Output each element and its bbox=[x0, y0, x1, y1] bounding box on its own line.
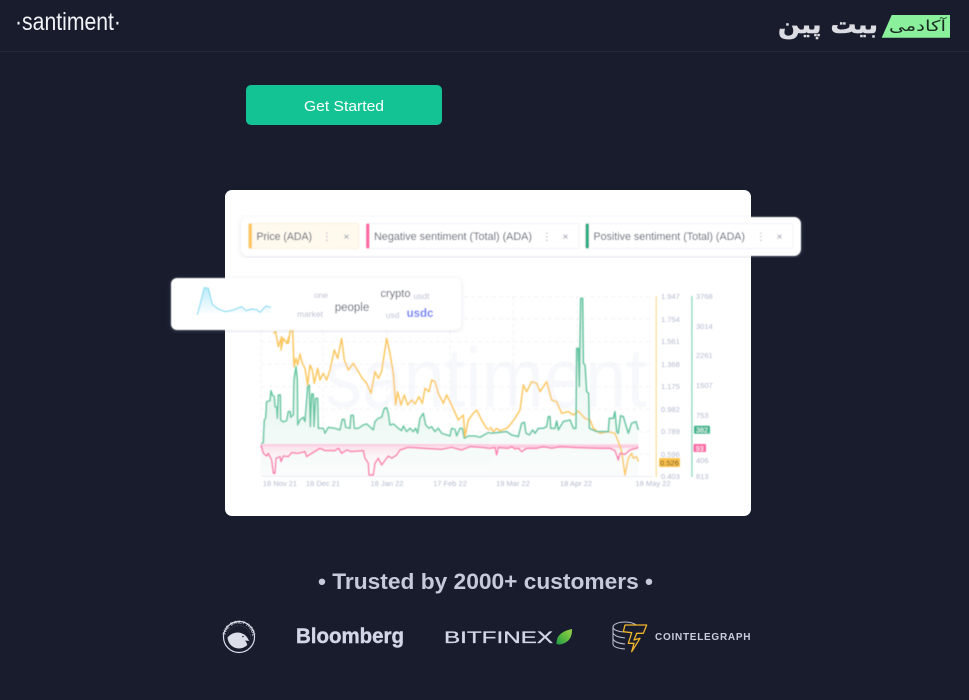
trending words: usdc bbox=[407, 308, 434, 320]
chart: price and sentiment: 3014 bbox=[696, 322, 713, 331]
chart: price and sentiment bbox=[261, 292, 713, 488]
logo: the daily hodl eagle: THE DAILY HODL bbox=[222, 620, 256, 636]
heading: trusted by customers: • Trusted by 2000+ customers • bbox=[318, 569, 653, 594]
logo: academy badge: بیت پین bbox=[778, 10, 878, 40]
logo: academy badge bbox=[778, 10, 950, 40]
chip: positive sentiment bbox=[586, 224, 793, 248]
chart: price and sentiment: 1.947 bbox=[661, 292, 680, 301]
logo: bloomberg: Bloomberg bbox=[296, 625, 404, 648]
chart: price and sentiment: 2261 bbox=[696, 351, 713, 360]
sparkline bbox=[197, 288, 271, 315]
chip: negative sentiment: ⋮ bbox=[542, 231, 552, 243]
chip: price: Price (ADA) bbox=[256, 231, 312, 243]
chart: price and sentiment: 19 Mar 22 bbox=[496, 479, 530, 488]
chart: price and sentiment: 406 bbox=[696, 456, 709, 465]
logo: academy badge: آکادمی bbox=[889, 17, 947, 35]
chart: price and sentiment: 753 bbox=[696, 411, 709, 420]
chip: positive sentiment: ⋮ bbox=[756, 231, 766, 243]
panel: chart screenshot card bbox=[225, 190, 751, 516]
chart: price and sentiment: 0.403 bbox=[661, 472, 680, 481]
chart: price and sentiment: 18 Jan 22 bbox=[371, 479, 403, 488]
logo: santiment: ·santiment· bbox=[15, 8, 121, 36]
icon: coins and lightning bolt bbox=[613, 622, 647, 652]
chart: price and sentiment: 1.561 bbox=[661, 337, 680, 346]
chart: price and sentiment: 1.368 bbox=[661, 360, 680, 369]
chart: price and sentiment: 18 Dec 21 bbox=[306, 479, 340, 488]
chip: negative sentiment bbox=[366, 224, 579, 248]
chart: price and sentiment: 18 May 22 bbox=[635, 479, 671, 488]
chip: positive sentiment: × bbox=[776, 231, 783, 243]
chip: price: × bbox=[343, 231, 350, 243]
chart: price and sentiment: 0.526 bbox=[660, 458, 679, 468]
button: get started: Get Started bbox=[304, 98, 384, 115]
chart: price and sentiment: 0.789 bbox=[661, 427, 680, 436]
trending words: usdt bbox=[413, 291, 430, 301]
chart: price and sentiment: 813 bbox=[696, 472, 709, 481]
trending words bbox=[297, 288, 434, 320]
logo: bitfinex: BITFINEX bbox=[444, 628, 553, 647]
chip: negative sentiment: Negative sentiment (Total) (ADA) bbox=[374, 231, 532, 243]
icon: bitfinex leaf bbox=[556, 629, 572, 644]
chart: price and sentiment: 0.982 bbox=[661, 405, 680, 414]
chart: price and sentiment: 1.175 bbox=[661, 382, 680, 391]
button: get started bbox=[246, 85, 442, 125]
chip: price bbox=[248, 224, 358, 248]
chart: price and sentiment: 18 Nov 21 bbox=[263, 479, 297, 488]
logo: cointelegraph: COINTELEGRAPH bbox=[655, 632, 750, 643]
chip: price: ⋮ bbox=[322, 231, 332, 243]
logo: cointelegraph bbox=[613, 622, 750, 652]
panel: social trends word cloud bbox=[171, 278, 461, 330]
chip: positive sentiment: Positive sentiment (Total) (ADA) bbox=[594, 231, 745, 243]
chart: price and sentiment: 17 Feb 22 bbox=[433, 479, 467, 488]
trending words: people bbox=[335, 302, 369, 314]
chart: price and sentiment: 3768 bbox=[696, 292, 713, 301]
chart: price and sentiment: santiment bbox=[325, 331, 647, 425]
logo: bitfinex bbox=[444, 628, 572, 647]
panel: metric selector toolbar bbox=[241, 217, 801, 256]
trending words: market bbox=[297, 309, 324, 319]
chart: price and sentiment: 18 Apr 22 bbox=[560, 479, 592, 488]
chart: price and sentiment: 93 bbox=[696, 446, 704, 453]
trending words: usd bbox=[386, 310, 400, 320]
chart: price and sentiment: 1.754 bbox=[661, 315, 680, 324]
trending words: one bbox=[314, 290, 328, 300]
chart: price and sentiment: 0.596 bbox=[661, 450, 680, 459]
trending words: crypto bbox=[381, 288, 410, 300]
chart: price and sentiment: 382 bbox=[696, 428, 708, 434]
chart: price and sentiment: 1507 bbox=[696, 381, 713, 390]
logo: the daily hodl eagle bbox=[222, 620, 256, 654]
chip: negative sentiment: × bbox=[562, 231, 569, 243]
